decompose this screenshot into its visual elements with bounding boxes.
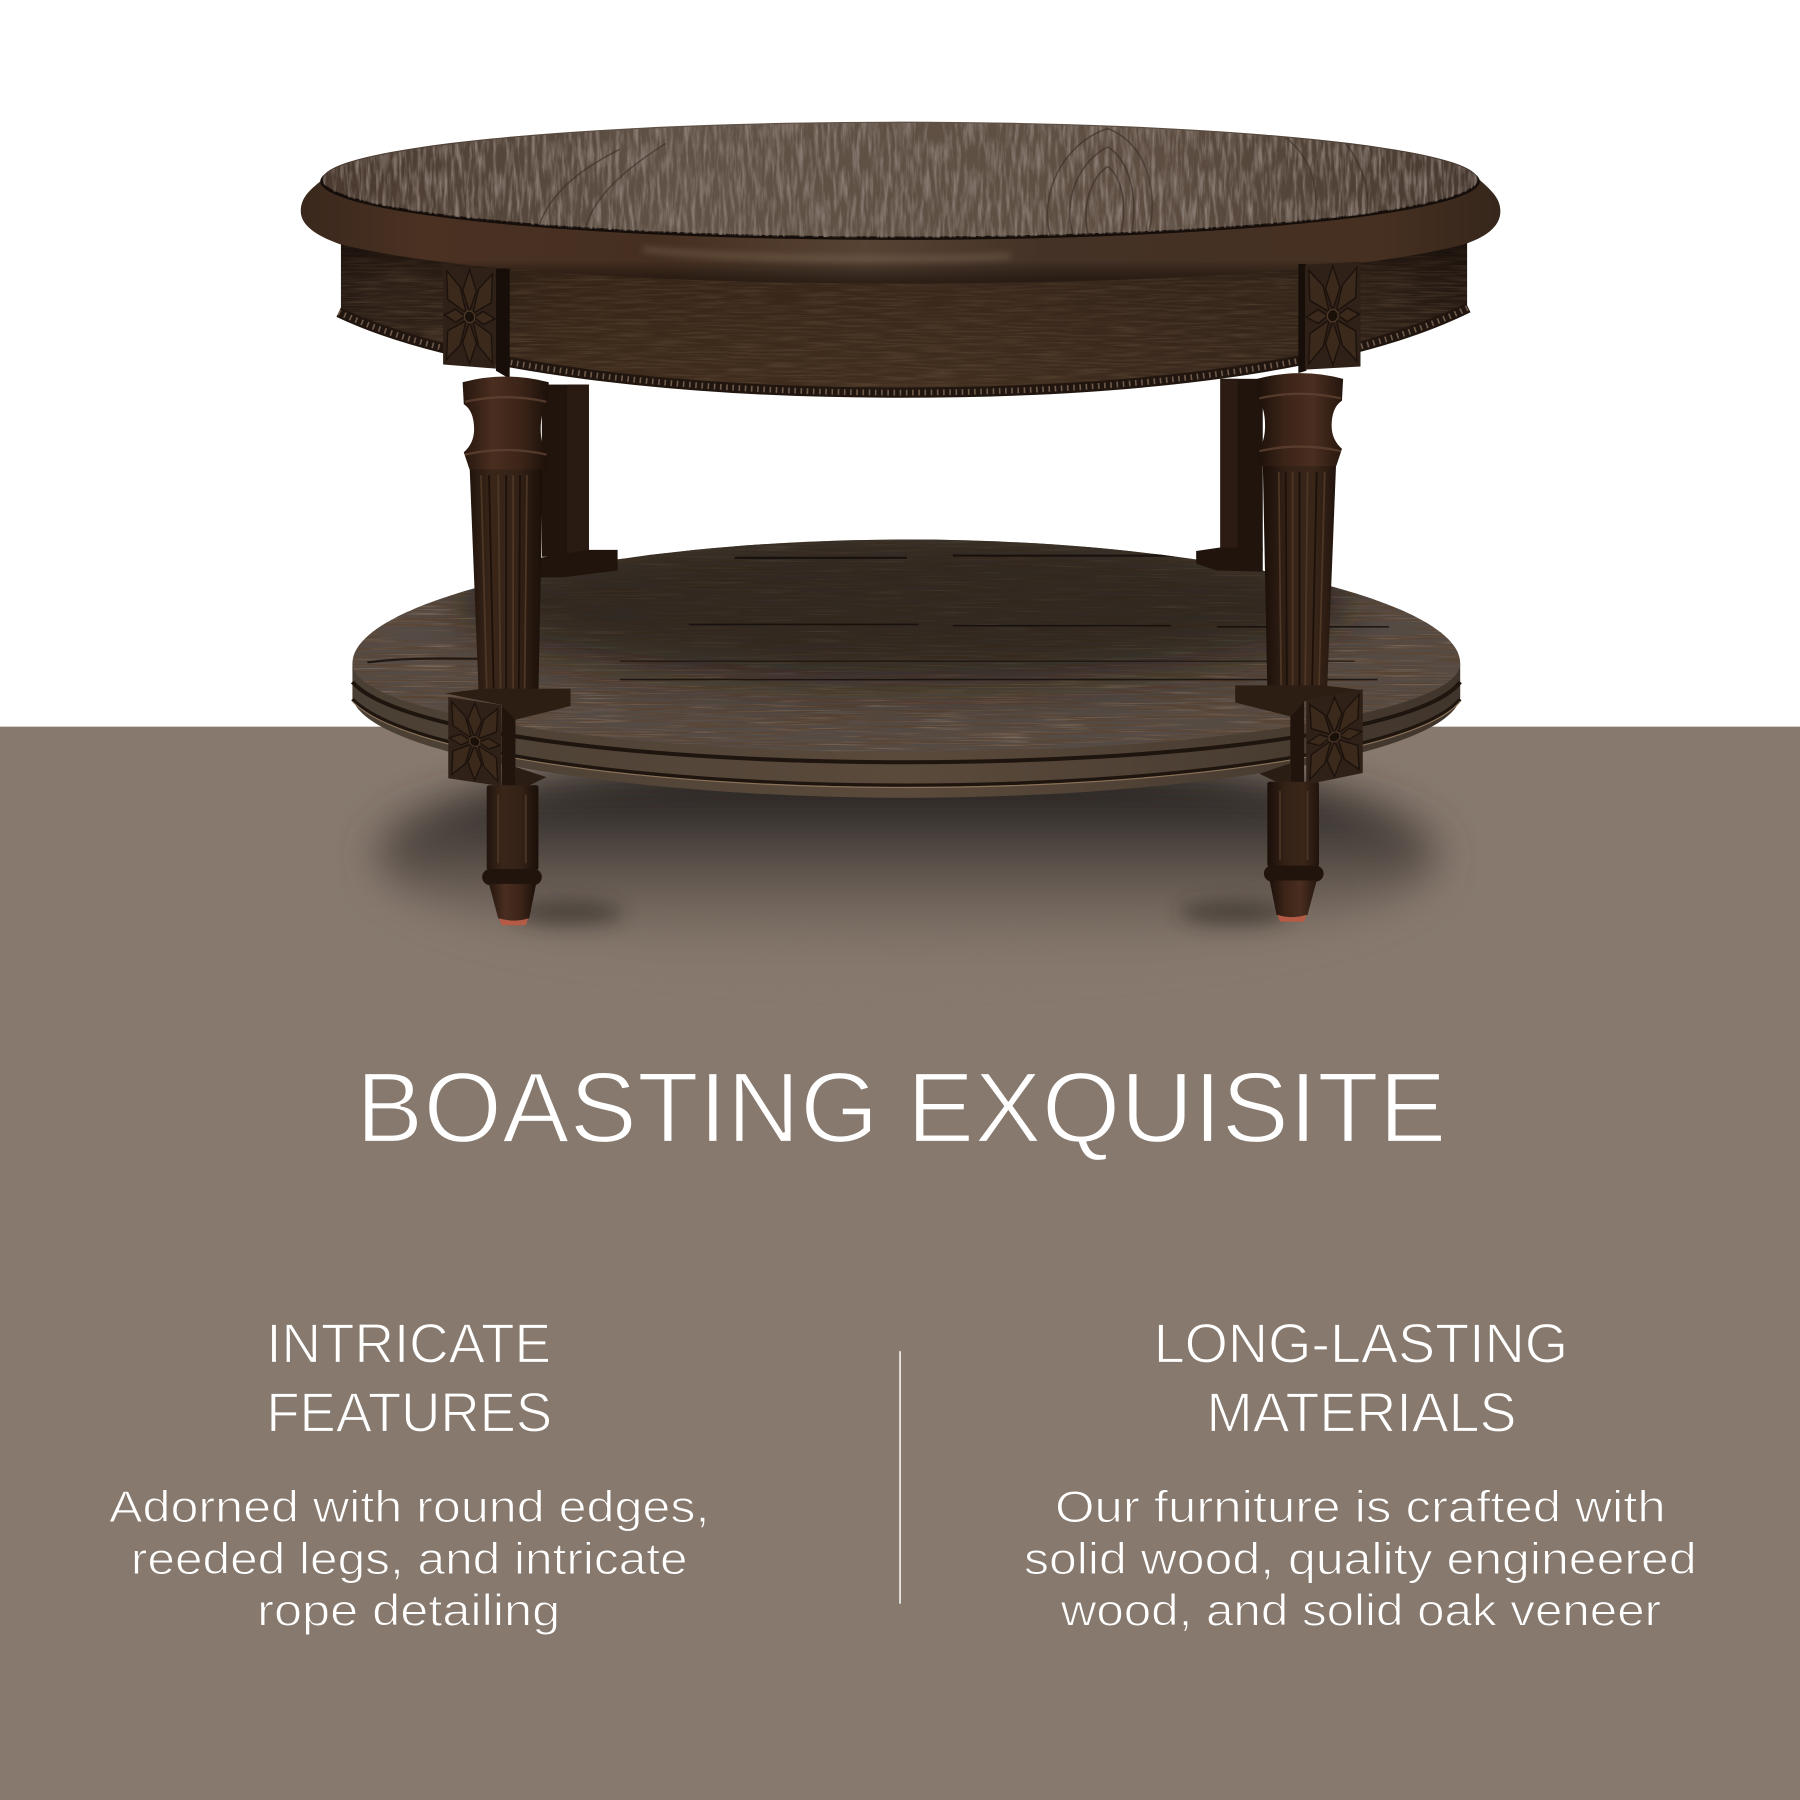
body text: long-lasting materials: solid wood, quality engineered (1024, 1534, 1697, 1584)
column: long-lasting materials (1024, 1313, 1697, 1636)
title: BOASTING EXQUISITE (356, 1053, 1446, 1164)
lower shelf (344, 520, 1469, 798)
heading: long-lasting materials: MATERIALS (1207, 1382, 1516, 1444)
body text: intricate features (109, 1482, 709, 1636)
body text: long-lasting materials: wood, and solid oak veneer (1060, 1586, 1661, 1636)
front right leg (1235, 373, 1363, 922)
apron carved block: left (443, 265, 510, 379)
heading: long-lasting materials (1154, 1313, 1568, 1444)
rope trim (339, 308, 1468, 393)
heading: intricate features: FEATURES (266, 1382, 552, 1444)
rear legs (540, 379, 1263, 577)
heading: intricate features: INTRICATE (266, 1313, 551, 1375)
table top rim (301, 178, 1500, 284)
front left leg (445, 377, 571, 925)
body text: long-lasting materials: Our furniture is crafted with (1055, 1482, 1666, 1532)
column: intricate features (109, 1313, 709, 1636)
body text: intricate features: reeded legs, and intricate (131, 1534, 688, 1584)
table top surface with oak grain (316, 121, 1487, 241)
heading: intricate features (266, 1313, 552, 1444)
background: white upper area (0, 0, 1800, 727)
body text: intricate features: rope detailing (257, 1586, 560, 1636)
background: taupe lower panel (0, 727, 1800, 1800)
body text: long-lasting materials (1024, 1482, 1697, 1636)
heading: long-lasting materials: LONG-LASTING (1154, 1313, 1568, 1375)
apron carved block: right (1298, 262, 1361, 373)
table apron with rope trim (336, 243, 1470, 398)
body text: intricate features: Adorned with round edges, (109, 1482, 709, 1532)
table floor shadow (377, 750, 1437, 961)
